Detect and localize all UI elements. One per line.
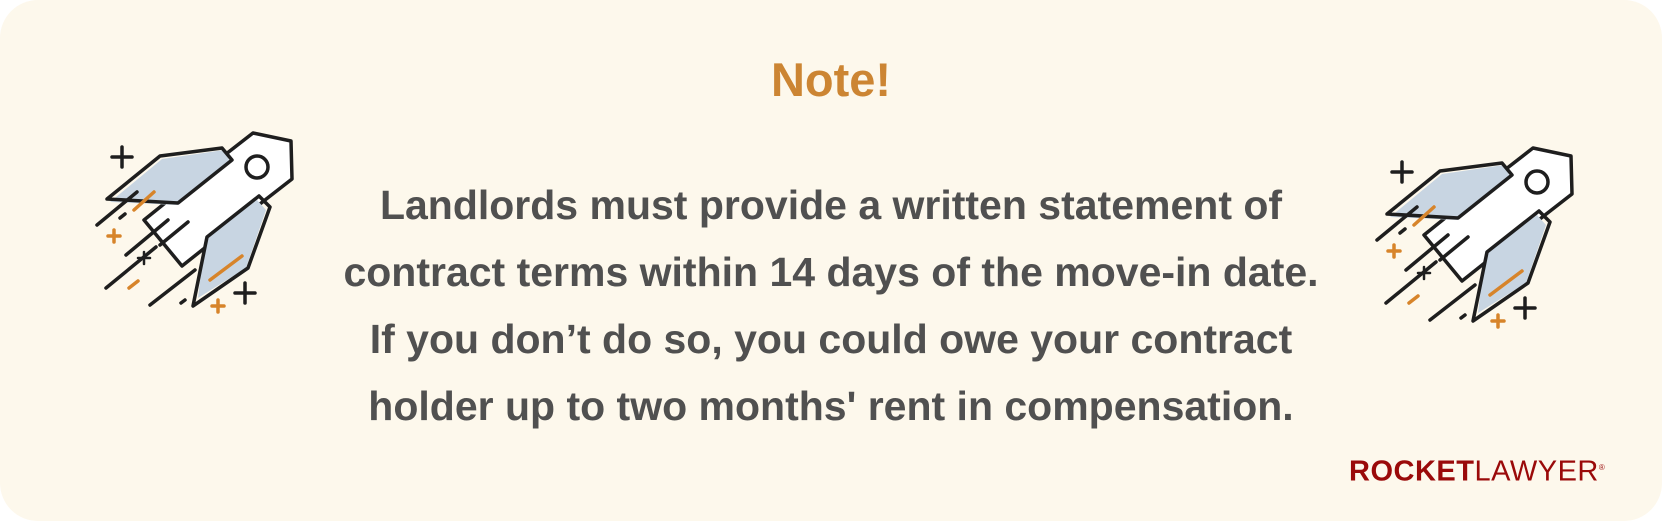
- text block: note: Landlords must provide a written statement of: [380, 182, 1282, 228]
- icon: rocket left: [97, 133, 292, 312]
- icon: rocket right: [1377, 148, 1572, 327]
- logo: Rocket Lawyer: ROCKETLAWYER®: [1349, 456, 1605, 488]
- text block: note: holder up to two months' rent in compensation.: [368, 383, 1294, 429]
- text block: note: [343, 182, 1319, 429]
- text block: note: contract terms within 14 days of the move-in date.: [343, 249, 1319, 295]
- text block: note: If you don’t do so, you could owe your contract: [370, 316, 1292, 362]
- title: Note!: [771, 53, 891, 106]
